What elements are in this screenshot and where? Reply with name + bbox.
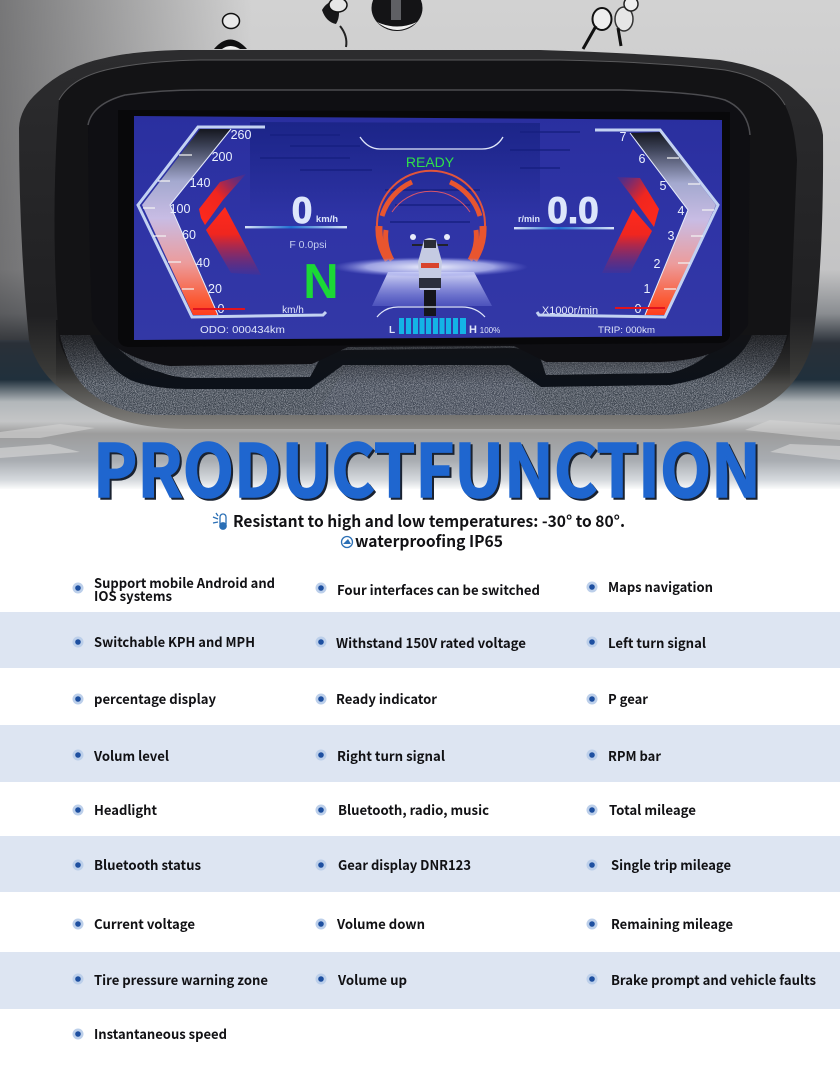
red segments [617,177,659,227]
motorcycle [410,234,450,316]
feature: mobile systems: IOS systems [94,585,172,605]
rpm numbers: 2 [654,257,661,271]
title: PRODUCTFUNCTION [93,413,761,519]
feature: voltage: Withstand 150V rated voltage [336,632,526,652]
odometer: ODO: 000434km [200,324,285,336]
tachometer gauge [537,130,718,317]
feature: volume level: Volum level [93,745,169,765]
feature: single trip: Single trip mileage [611,854,731,874]
feature: instantaneous speed: Instantaneous speed [94,1023,227,1043]
feature: volume down: Volume down [336,913,425,933]
speed readout: F 0.0psi [289,239,327,251]
battery level bar [389,318,500,336]
bezel outer shell [19,50,823,429]
speed readout: km/h [316,214,338,225]
feature: percentage: percentage display [94,688,216,708]
temperature resistance text: Resistant to high and low temperatures: -30° to 80°. [233,508,625,532]
water drops [214,0,638,49]
rpm readout: r/min [518,214,540,224]
road glow [332,257,528,306]
feature: headlight: Headlight [94,799,157,819]
feature: four interfaces: Four interfaces can be switched [337,579,540,599]
battery level bar: 100% [480,326,500,335]
bezel inner textured band [106,335,726,378]
feature: P gear [586,688,648,708]
feature: ready: Ready indicator [336,688,437,708]
feature: mobile systems: Support mobile Android and [94,572,275,592]
rpm readout [514,190,614,231]
speed numbers: 60 [182,228,196,242]
feature: KPH MPH: Switchable KPH and MPH [94,631,255,651]
rpm numbers: 3 [668,229,675,243]
rpm numbers: 4 [678,204,685,218]
ready indicator: READY [406,154,455,170]
feature: current voltage: Current voltage [94,913,195,933]
feature: remaining mileage: Remaining mileage [611,913,733,933]
speed readout: 0 [292,190,312,231]
speed numbers: 0 [218,302,225,316]
speed numbers: 40 [196,256,210,270]
icon: thermometer [213,513,226,529]
speedometer gauge [138,127,326,317]
feature: tire pressure: Tire pressure warning zone [94,969,268,989]
bezel inner recess [88,90,750,366]
feature: bluetooth status: Bluetooth status [94,854,201,874]
feature: right turn: Right turn signal [337,745,445,765]
speed unit: km/h [282,305,304,316]
red segments [199,174,246,225]
speed numbers: 260 [231,128,251,142]
gauge band [142,129,231,315]
rpm numbers: 7 [620,130,627,144]
battery level bar: L [389,325,395,336]
feature: bluetooth radio: Bluetooth, radio, music [338,799,489,819]
battery level bar: H [469,324,477,336]
waterproofing text: waterproofing IP65 [355,528,503,552]
bezel textured lower body [60,335,787,415]
bezel centre notch [316,367,548,415]
speed numbers: 20 [208,282,222,296]
gear indicator N: N [303,255,339,309]
panel: display screen [134,116,722,340]
feature: total mileage: Total mileage [609,799,696,819]
rpm unit: X1000r/min [542,305,598,317]
feature: rpm bar [586,745,661,765]
feature: brake prompt: Brake prompt and vehicle faults [611,969,816,989]
trip meter: TRIP: 000km [598,325,655,336]
speed numbers: 140 [190,176,210,190]
rpm numbers: 5 [660,179,667,193]
row bands [0,612,840,1009]
speed readout [245,190,347,251]
bezel top shading [56,320,790,382]
feature: left turn: Left turn signal [608,632,706,652]
tach band [630,132,716,315]
feature: gear display: Gear display DNR123 [338,854,471,874]
motorcycle ring [377,171,485,261]
rpm numbers [620,130,685,316]
rpm readout: 0.0 [547,190,599,231]
feature: maps: Maps navigation [608,576,713,596]
feature: mobile systems [72,572,275,605]
icon: waterproof [342,536,352,548]
title: PRODUCTFUNCTION [95,415,763,521]
rpm numbers: 0 [635,302,642,316]
dashboard bezel [19,50,823,429]
speed numbers [170,128,251,316]
bezel lower groove [90,335,752,389]
speed numbers: 100 [170,202,190,216]
feature list [72,572,816,1043]
feature: rpm bar: RPM bar [608,745,661,765]
rpm numbers: 1 [644,282,651,296]
feature: P gear: P gear [608,688,648,708]
battery arc [377,307,485,317]
speed numbers: 200 [212,150,232,164]
rpm numbers: 6 [639,152,646,166]
feature: volume up: Volume up [337,969,407,989]
top curve [360,137,503,149]
